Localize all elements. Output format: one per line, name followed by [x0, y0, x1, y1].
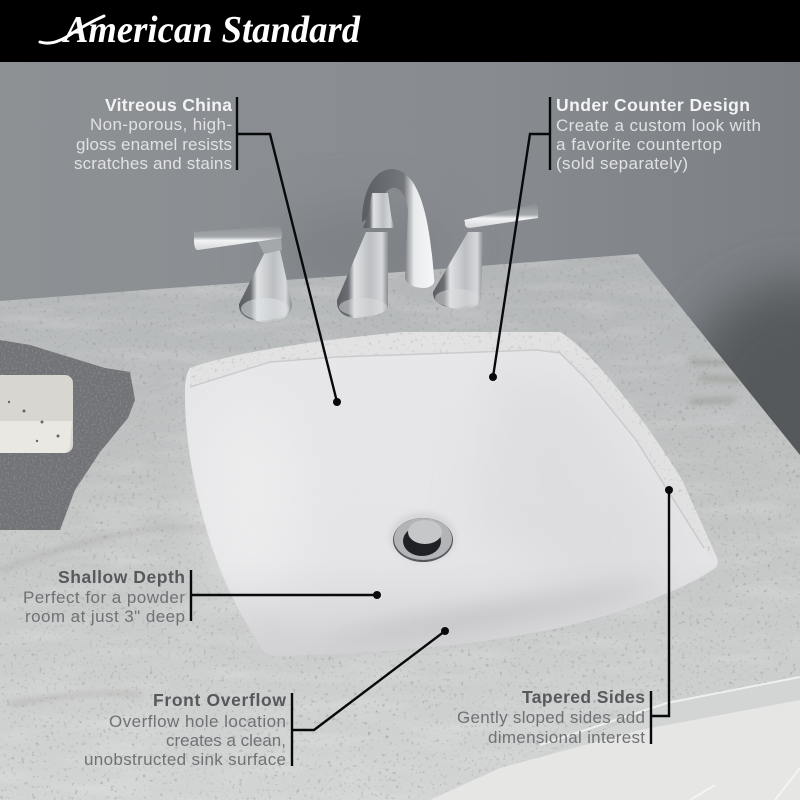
sink basin	[180, 325, 725, 656]
faucet: centre spout and arch	[337, 169, 434, 318]
faucet: left handle	[194, 226, 292, 322]
wall shadows	[296, 218, 800, 455]
callout: Shallow Depth	[23, 567, 381, 626]
cabinet and counter lip	[430, 677, 800, 800]
callout: Under Counter Design	[489, 95, 761, 381]
callout: Tapered Sides: Gently sloped sides add	[457, 708, 645, 727]
callout: Vitreous China: gloss enamel resists	[76, 135, 232, 154]
callout: Shallow Depth: Shallow Depth	[58, 567, 185, 587]
callout: Front Overflow: unobstructed sink surface	[84, 750, 286, 769]
callout: Tapered Sides	[457, 486, 673, 747]
callout: Front Overflow: creates a clean,	[166, 731, 286, 750]
callout: Vitreous China: scratches and stains	[74, 154, 232, 173]
countertop	[0, 250, 800, 800]
faucet: right handle	[433, 204, 538, 309]
towel	[0, 335, 140, 535]
header bar	[0, 0, 800, 62]
logo: American Standard	[62, 9, 361, 51]
callout: Shallow Depth: room at just 3" deep	[25, 607, 185, 626]
callout: Front Overflow: Overflow hole location	[109, 712, 286, 731]
callout: Shallow Depth: Perfect for a powder	[23, 588, 185, 607]
callout: Vitreous China: Vitreous China	[105, 95, 232, 115]
callout: Front Overflow	[84, 627, 449, 769]
callout: Tapered Sides: Tapered Sides	[522, 687, 645, 707]
callout: Front Overflow: Front Overflow	[153, 690, 286, 710]
callout: Under Counter Design: a favorite countertop	[556, 135, 722, 154]
callout: Under Counter Design: Under Counter Design	[556, 95, 750, 115]
callout: Vitreous China: Non-porous, high-	[90, 115, 232, 134]
callout: Under Counter Design: (sold separately)	[556, 154, 688, 173]
sink rim with stone edge	[190, 332, 710, 552]
drain	[390, 512, 456, 562]
callout: Vitreous China	[74, 95, 341, 406]
callout: Tapered Sides: dimensional interest	[488, 728, 645, 747]
callout: Under Counter Design: Create a custom look with	[556, 116, 761, 135]
soap bar	[0, 375, 73, 453]
